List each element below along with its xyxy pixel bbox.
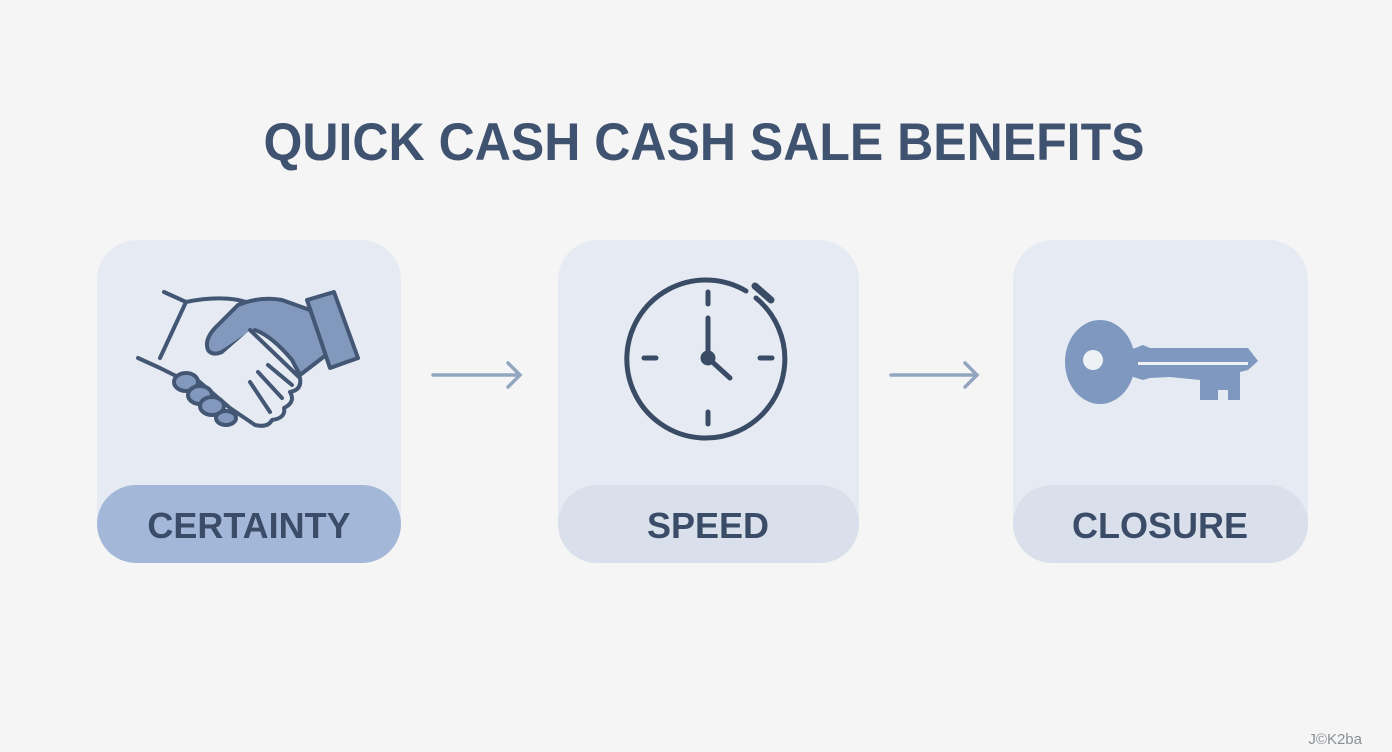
watermark: J©K2ba bbox=[1308, 731, 1363, 748]
label: speed: SPEED bbox=[647, 505, 769, 546]
arrow 2 bbox=[891, 363, 977, 387]
title: QUICK CASH CASH SALE BENEFITS bbox=[264, 113, 1144, 172]
label: speed bbox=[558, 485, 859, 563]
icon: stopwatch clock bbox=[627, 280, 785, 438]
label: closure bbox=[1013, 485, 1308, 563]
panel: certainty bbox=[97, 240, 401, 563]
panel: speed bbox=[558, 240, 859, 563]
icon: key bbox=[1065, 320, 1258, 404]
label: certainty bbox=[97, 485, 401, 563]
icon: handshake bbox=[138, 292, 358, 426]
panel: closure bbox=[1013, 240, 1308, 563]
arrow 1 bbox=[433, 363, 520, 387]
label: closure: CLOSURE bbox=[1072, 505, 1248, 546]
label: certainty: CERTAINTY bbox=[147, 505, 351, 546]
